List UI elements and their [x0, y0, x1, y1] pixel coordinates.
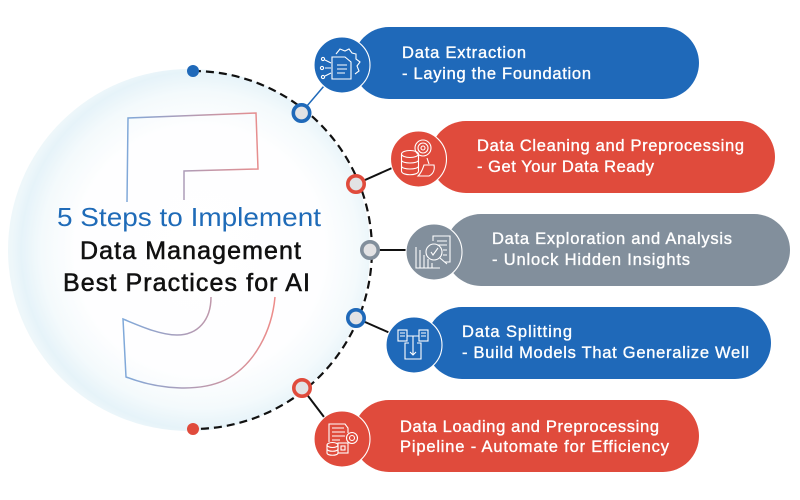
step 1: Data Extraction: Data Extraction — [402, 44, 526, 62]
dashed arc — [193, 71, 372, 429]
title — [57, 202, 322, 297]
arc start dot — [187, 65, 199, 77]
icon: split data — [398, 330, 428, 359]
arc end dot — [187, 423, 199, 435]
step 1: Data Extraction: - Laying the Foundation — [402, 65, 591, 83]
step 3: Data Exploration and Analysis: Data Exploration and Analysis — [492, 230, 732, 248]
step 2: Data Cleaning and Preprocessing: Data Cleaning and Preprocessing — [477, 137, 744, 155]
step 4: Data Splitting: Data Splitting — [462, 323, 572, 341]
step 5: Data Loading and Preprocessing Pipeline: Pipeline - Automate for Efficiency — [400, 438, 670, 456]
title: Best Practices for AI — [63, 269, 310, 297]
icon: document gear — [320, 49, 360, 79]
big numeral 5 outline — [123, 113, 275, 388]
icon: pipeline gear — [327, 424, 358, 455]
icon: chart and magnifier — [416, 236, 450, 268]
step 3: Data Exploration and Analysis — [362, 214, 790, 286]
step 1: Data Extraction — [293, 27, 699, 121]
title: 5 Steps to Implement — [57, 202, 322, 232]
step 4: Data Splitting: - Build Models That Generalize Well — [462, 344, 749, 362]
step 2: Data Cleaning and Preprocessing — [348, 121, 775, 193]
step 2: Data Cleaning and Preprocessing: - Get Your Data Ready — [477, 158, 655, 176]
step 4: Data Splitting — [348, 307, 771, 379]
step 5: Data Loading and Preprocessing Pipeline — [294, 380, 699, 472]
icon: database and brush — [402, 140, 434, 176]
step 3: Data Exploration and Analysis: - Unlock Hidden Insights — [492, 251, 690, 269]
title: Data Management — [80, 237, 301, 265]
central circle — [8, 69, 370, 431]
step 5: Data Loading and Preprocessing Pipeline: Data Loading and Preprocessing — [400, 418, 659, 436]
